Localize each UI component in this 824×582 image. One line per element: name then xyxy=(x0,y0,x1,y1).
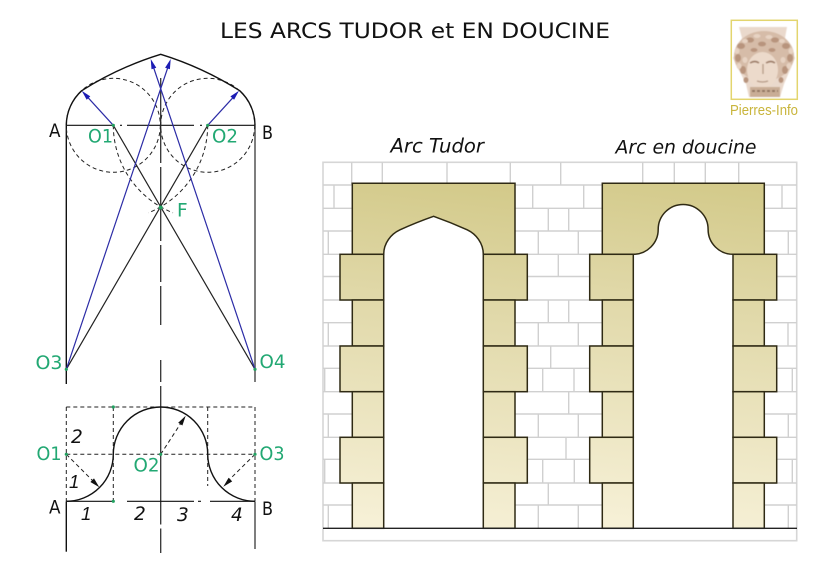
arch: doucine xyxy=(590,183,777,528)
lintel xyxy=(352,183,515,254)
left jamb blocks xyxy=(590,254,633,528)
side lines xyxy=(65,125,67,384)
black radius lines xyxy=(66,125,255,369)
heading: Arc en doucine: Arc en doucine xyxy=(614,136,756,158)
heading: Arc Tudor: Arc Tudor xyxy=(388,134,485,157)
panel: doucine arch construction xyxy=(36,360,284,553)
doucine outline xyxy=(66,407,255,501)
logo: Pierres-Info xyxy=(730,20,798,119)
left jamb blocks xyxy=(340,254,384,528)
logo frame xyxy=(731,20,797,99)
labels: O4 xyxy=(260,352,286,373)
construction grid xyxy=(66,407,255,501)
labels: 4 xyxy=(231,505,243,526)
icon: sculpted head xyxy=(733,27,795,97)
arrowheads xyxy=(82,59,239,100)
labels: A xyxy=(49,498,61,518)
labels: O1 xyxy=(88,126,113,148)
labels: 2 xyxy=(71,427,83,448)
labels: O3 xyxy=(260,444,284,465)
labels: B xyxy=(262,123,273,144)
opening xyxy=(633,200,733,528)
centre points xyxy=(65,405,257,503)
panel: Tudor arch construction xyxy=(36,54,286,384)
labels: 1 xyxy=(69,471,79,492)
labels: O2 xyxy=(212,126,238,148)
labels xyxy=(36,427,284,526)
right jamb blocks xyxy=(733,254,777,528)
arch outline xyxy=(66,54,255,125)
ground line xyxy=(323,527,797,529)
labels: O1 xyxy=(36,444,62,465)
panel: brick wall xyxy=(323,162,797,541)
labels: A xyxy=(49,121,61,142)
labels: 1 xyxy=(81,503,91,524)
construction circles and arcs xyxy=(66,78,255,213)
radius arrows xyxy=(66,416,255,487)
blue radius lines xyxy=(66,64,255,369)
logo text: Pierres-Info xyxy=(730,103,798,119)
labels: B xyxy=(262,499,273,520)
centre line xyxy=(160,360,162,553)
centre line xyxy=(160,78,162,325)
side lines xyxy=(65,501,67,552)
base line xyxy=(66,500,255,502)
labels: O3 xyxy=(36,353,62,374)
centre points xyxy=(65,124,257,371)
title: LES ARCS TUDOR et EN DOUCINE xyxy=(220,19,610,44)
labels: O2 xyxy=(134,456,160,477)
labels xyxy=(36,121,286,374)
lintel xyxy=(602,183,764,254)
arch: Tudor xyxy=(340,183,527,528)
labels: 2 xyxy=(134,504,146,525)
opening xyxy=(384,200,483,528)
right jamb blocks xyxy=(483,254,527,528)
labels: 3 xyxy=(177,505,189,526)
labels: F xyxy=(177,201,188,222)
base line A-B xyxy=(66,124,255,126)
